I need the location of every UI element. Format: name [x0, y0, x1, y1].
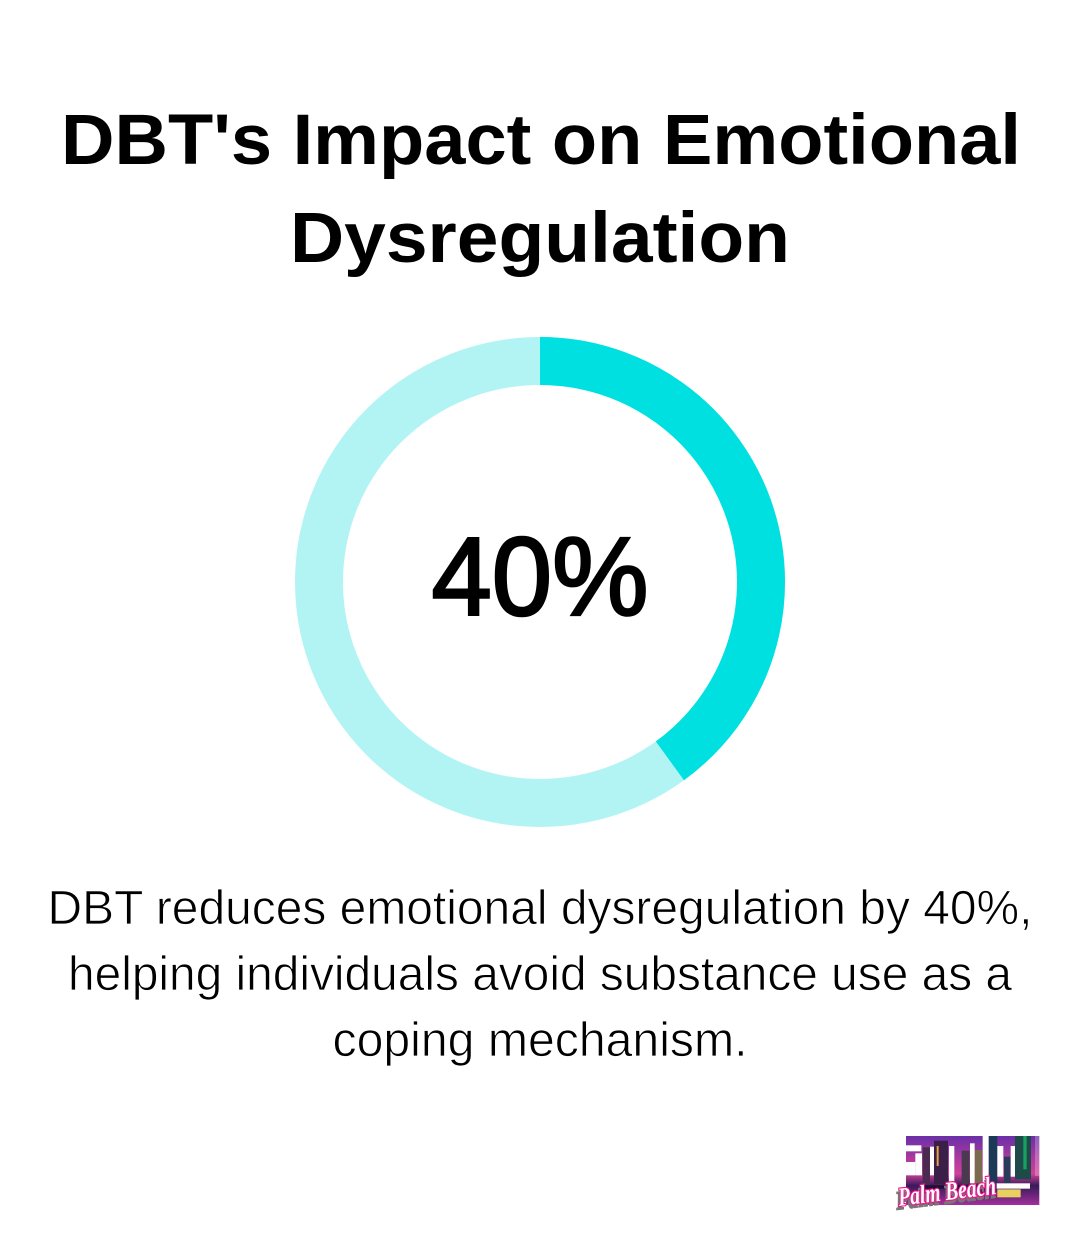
center percentage: 40% — [432, 515, 648, 639]
description text: helping individuals avoid substance use as a — [68, 948, 1012, 1001]
description text: DBT reduces emotional dysregulation by 40%, — [48, 882, 1032, 935]
title — [61, 101, 1021, 278]
donut value arc — [540, 361, 761, 761]
logo: Amity Palm Beach — [893, 1130, 1039, 1216]
logo city image — [906, 1136, 1039, 1205]
logo white letter gaps — [906, 1130, 1039, 1189]
title: Dysregulation — [290, 199, 790, 278]
description text: coping mechanism. — [332, 1014, 748, 1067]
title: DBT's Impact on Emotional — [61, 101, 1021, 180]
donut chart: 40 percent — [319, 361, 761, 803]
donut track — [319, 361, 761, 803]
logo script: Palm Beach: Palm Beach — [896, 1171, 997, 1212]
logo buildings — [923, 1136, 1031, 1197]
logo script: Palm Beach: Palm Beach — [893, 1174, 997, 1216]
description text — [48, 882, 1032, 1067]
